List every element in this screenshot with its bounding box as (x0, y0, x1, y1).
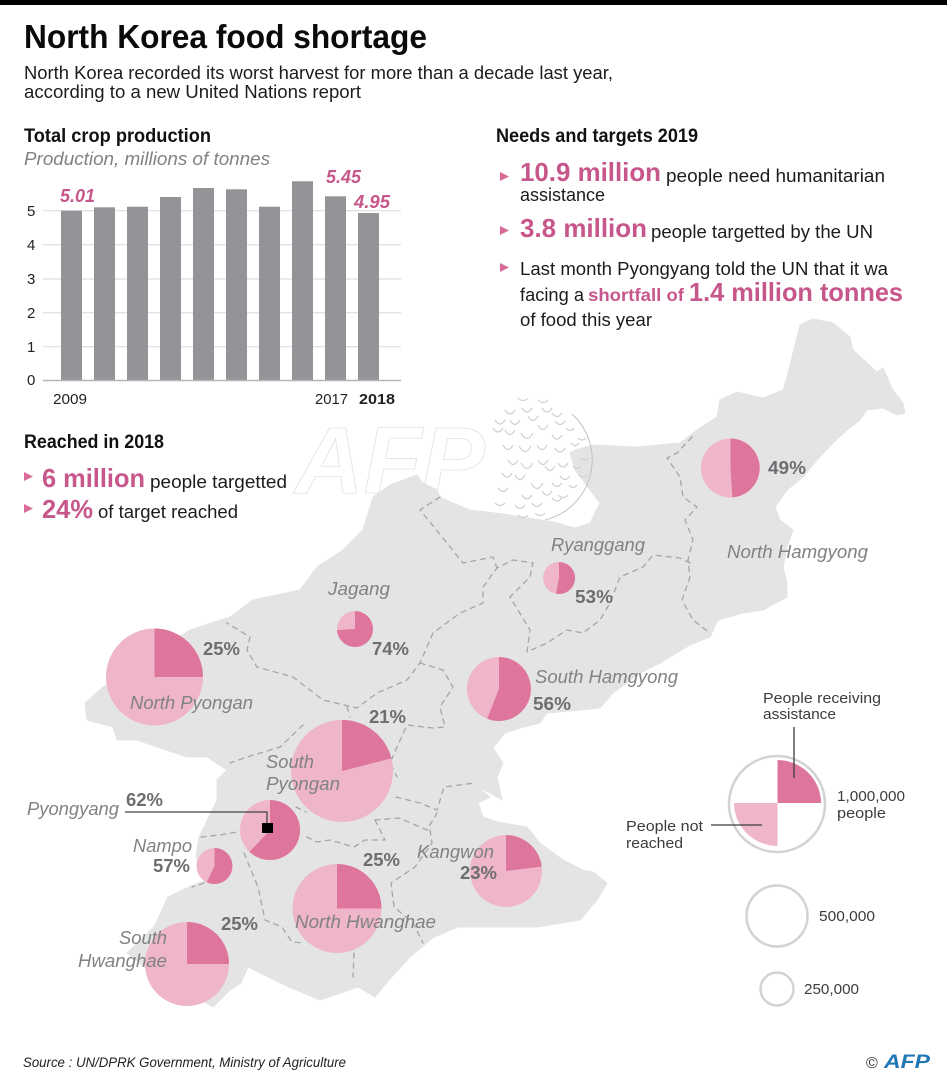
bullet: 24 percent (24, 494, 238, 524)
bullet: 6 million: 6 million (42, 463, 145, 493)
pie: Jagang: 74% (372, 639, 409, 659)
legend: 250,000: 250,000 (804, 981, 859, 998)
panel: needs and targets 2019 (496, 126, 903, 330)
pie: South Hwanghae: 25% (221, 914, 258, 934)
pie: South Hwanghae: Hwanghae (78, 951, 167, 971)
title: North Korea food shortage (24, 18, 427, 55)
legend: 250,000 (760, 972, 859, 1006)
pie: South Hwanghae (78, 914, 258, 1006)
bullet: 10.9 million: 10.9 million (520, 157, 661, 187)
pie: South Hamgyong (467, 657, 678, 721)
pie: Jagang (327, 579, 409, 659)
bullet: 24 percent: 24% (42, 494, 93, 524)
pie: South Hwanghae: South (119, 928, 167, 948)
AFP credit: AFP (883, 1052, 930, 1073)
bullet: shortfall: 1.4 million tonnes (689, 277, 903, 307)
bar chart: 2 (27, 305, 35, 322)
pie: Pyongyang: Pyongyang (27, 799, 119, 819)
bullet: 3.8 million: 3.8 million (520, 213, 647, 243)
pie: Nampo: Nampo (133, 836, 192, 856)
heading: reached in 2018: Reached in 2018 (24, 432, 164, 453)
AFP credit (866, 1052, 930, 1073)
pie: North Pyongan (106, 628, 253, 726)
pie: South Pyongan (266, 707, 406, 822)
legend: 500,000: 500,000 (819, 908, 875, 925)
pie: South Hamgyong: South Hamgyong (535, 667, 678, 687)
pie: North Hamgyong (701, 438, 868, 562)
bullet: shortfall: shortfall of (588, 285, 684, 305)
bullet: 10.9 million (500, 157, 885, 205)
bullet: shortfall: facing a (520, 284, 585, 305)
subtitle: according to a new United Nations report (24, 81, 361, 102)
panel: total crop production (24, 126, 401, 408)
subtitle: North Korea recorded its worst harvest for more than a decade last year, (24, 62, 613, 83)
pie: South Pyongan: Pyongan (266, 774, 340, 794)
pie: North Pyongan: North Pyongan (130, 693, 253, 713)
pie: Pyongyang: 62% (126, 790, 163, 810)
legend: 1,000,000 circle (729, 756, 825, 852)
legend: 1,000,000 label: people (837, 805, 886, 822)
AFP credit: © (866, 1055, 878, 1072)
bar chart: 1 (27, 339, 35, 356)
pie: Ryanggang (543, 535, 645, 607)
pie: South Pyongan: 21% (369, 707, 406, 727)
pie: Kangwon: 23% (460, 863, 497, 883)
bar chart: 4 (27, 237, 35, 254)
pie: Nampo (133, 836, 232, 884)
heading: total crop production: Total crop production (24, 126, 211, 147)
bullet: 3.8 million: people targetted by the UN (651, 221, 873, 242)
bullet: shortfall (500, 258, 903, 330)
bullet: shortfall: of food this year (520, 309, 652, 330)
bar chart: 5.01 (60, 186, 95, 206)
bar chart: 3 (27, 271, 35, 288)
legend: people not reached (626, 818, 762, 852)
bullet: 10.9 million: assistance (520, 184, 605, 205)
province borders (192, 437, 710, 977)
pie: Kangwon (417, 835, 542, 907)
top black bar (0, 0, 947, 5)
pie: North Hwanghae: 25% (363, 850, 400, 870)
pie: Nampo: 57% (153, 856, 190, 876)
legend: people not reached: reached (626, 835, 683, 852)
legend (626, 690, 905, 1006)
map of North Korea (85, 319, 905, 1007)
legend: 1,000,000 label (837, 788, 905, 822)
subtitle (24, 62, 613, 102)
pie: North Hwanghae (292, 850, 436, 953)
bar chart: 4.95 (353, 192, 391, 212)
legend: people receiving assistance: assistance (763, 706, 836, 723)
legend: people not reached: People not (626, 818, 704, 835)
legend: 500,000 (746, 886, 875, 946)
pie: North Hwanghae: North Hwanghae (295, 912, 436, 932)
bar chart: 5.45 (326, 167, 362, 187)
pie: North Hamgyong: North Hamgyong (727, 542, 868, 562)
bullet: shortfall: Last month Pyongyang told the UN that it wa (520, 258, 889, 279)
bullet: 24 percent: of target reached (98, 501, 238, 522)
pie: South Hamgyong: 56% (533, 694, 571, 714)
legend: people receiving assistance: People receiving (763, 690, 881, 707)
heading: needs and targets: Needs and targets 2019 (496, 126, 698, 147)
bar chart: 0 (27, 372, 35, 389)
bullet: 10.9 million: people need humanitarian (666, 165, 885, 186)
bar chart: 2018 (359, 391, 395, 408)
panel: reached in 2018 (24, 432, 287, 524)
pie: South Pyongan: South (266, 752, 314, 772)
bar chart: 2017 (315, 391, 348, 408)
bullet: 6 million (24, 463, 287, 493)
bar chart: 5 (27, 203, 35, 220)
pie: Pyongyang (27, 790, 300, 860)
pie: Ryanggang: Ryanggang (551, 535, 645, 555)
source: Source : UN/DPRK Government, Ministry of Agriculture (23, 1054, 346, 1070)
bullet: 6 million: people targetted (150, 471, 287, 492)
legend: people receiving assistance (763, 690, 881, 778)
bar chart: 2009 (53, 391, 87, 408)
pie: North Pyongan: 25% (203, 639, 240, 659)
pie: Kangwon: Kangwon (417, 842, 494, 862)
watermark: AFP lettering: AFP (293, 408, 486, 514)
bar chart (27, 167, 401, 408)
legend: 1,000,000 label: 1,000,000 (837, 788, 905, 805)
pie: North Hamgyong: 49% (768, 458, 806, 478)
watermark: golf ball (493, 398, 592, 520)
bullet: 3.8 million (500, 213, 873, 243)
pie: Jagang: Jagang (327, 579, 390, 599)
subheading: units: Production, millions of tonnes (24, 149, 270, 169)
pie: Ryanggang: 53% (575, 587, 613, 607)
